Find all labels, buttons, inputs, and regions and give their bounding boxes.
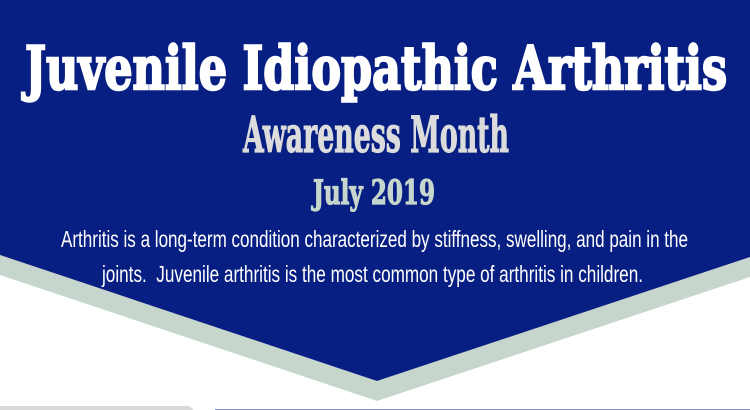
date: July 2019 bbox=[311, 173, 435, 213]
grey panel top edge bbox=[0, 406, 194, 410]
blue panel top edge bbox=[215, 409, 750, 410]
subtitle: Awareness Month bbox=[242, 105, 509, 164]
banner shadow chevron bbox=[0, 255, 750, 401]
description text bbox=[61, 226, 688, 287]
